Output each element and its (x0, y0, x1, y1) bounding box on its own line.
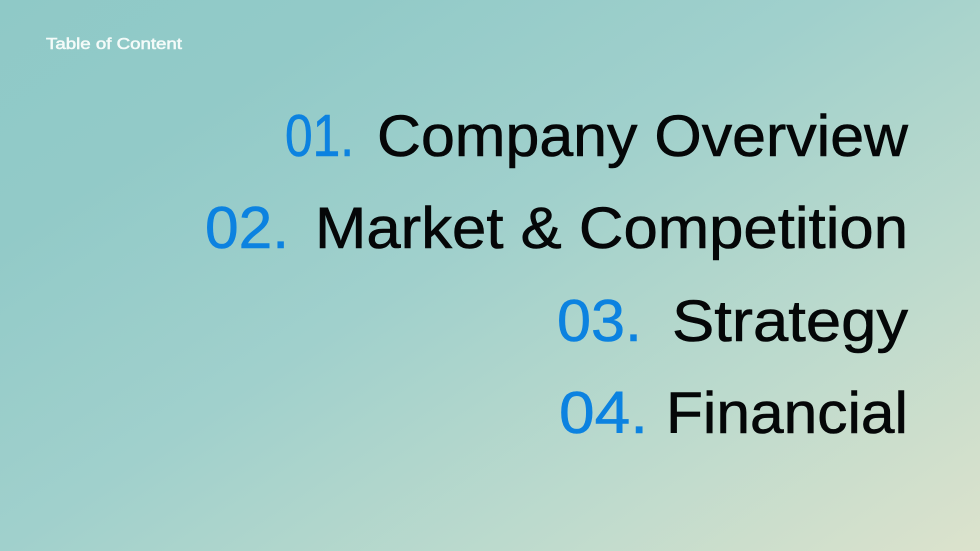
item 01: Company Overview: 01. (285, 103, 354, 169)
item 03: Strategy (557, 288, 908, 354)
item 02: Market & Competition: 02. (205, 195, 289, 261)
heading: Table of Content: Table of Content (46, 36, 183, 53)
item 03: Strategy: Strategy (672, 289, 908, 354)
item 04: Financial (559, 380, 908, 446)
item 04: Financial: Financial (666, 381, 908, 446)
item 03: Strategy: 03. (557, 288, 642, 354)
item 04: Financial: 04. (559, 380, 648, 446)
item 02: Market & Competition: Market & Competition (315, 196, 908, 261)
item 01: Company Overview: Company Overview (377, 104, 909, 169)
